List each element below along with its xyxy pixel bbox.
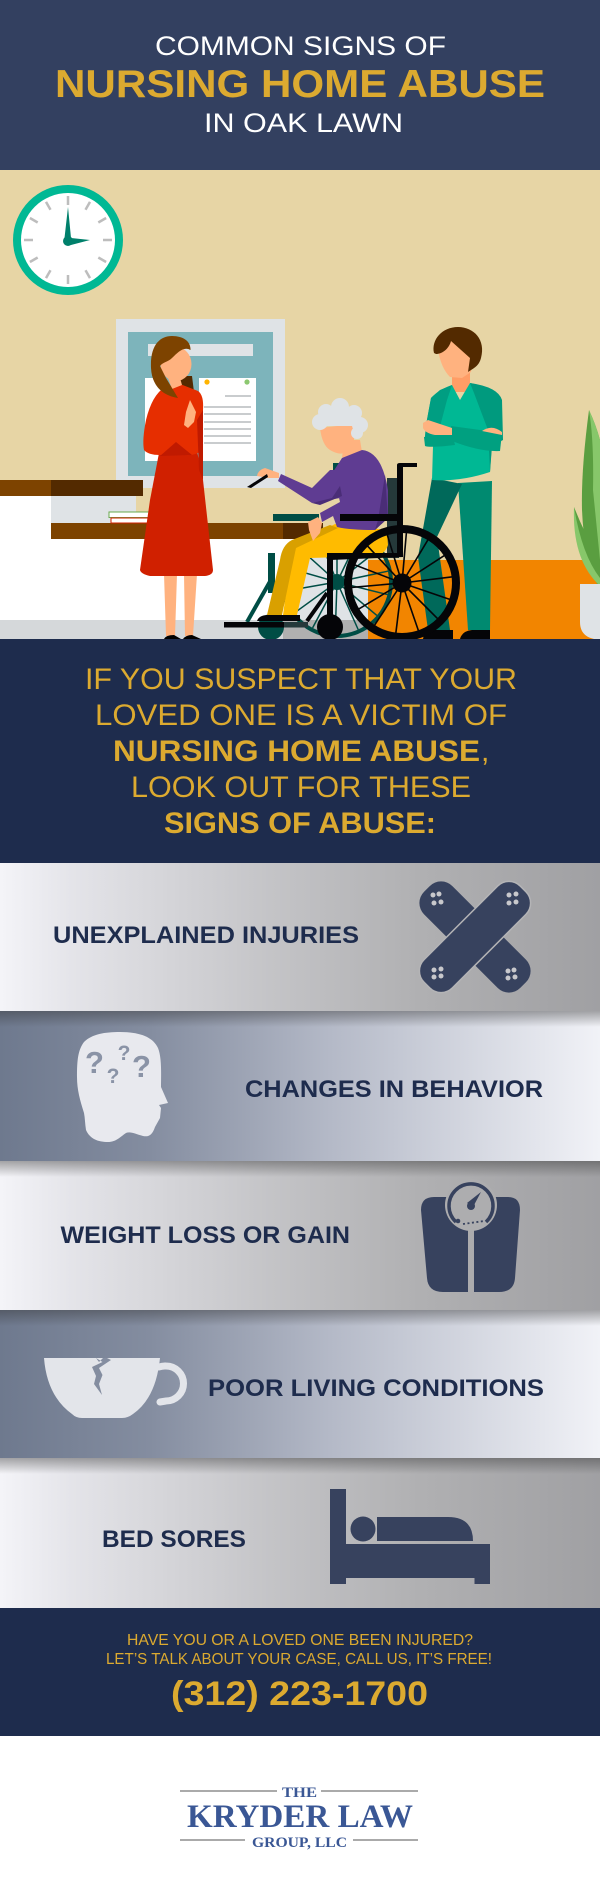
label: WEIGHT LOSS OR GAIN xyxy=(60,1222,350,1249)
title line 3: IN OAK LAWN xyxy=(204,108,403,138)
header panel xyxy=(0,0,600,170)
comma: , xyxy=(481,735,489,768)
label: POOR LIVING CONDITIONS xyxy=(208,1375,544,1402)
intro panel xyxy=(0,639,600,863)
logo: The Kryder Law Group: KRYDER LAW xyxy=(187,1799,413,1835)
icon: crossed bandages xyxy=(413,875,537,999)
icon: head with question marks: ? xyxy=(85,1045,104,1080)
cta line 1: HAVE YOU OR A LOVED ONE BEEN INJURED? xyxy=(127,1632,473,1649)
notice board xyxy=(116,319,285,488)
title line 2: NURSING HOME ABUSE xyxy=(55,63,545,106)
label: CHANGES IN BEHAVIOR xyxy=(245,1076,543,1103)
intro line 1: IF YOU SUSPECT THAT YOUR xyxy=(85,663,517,696)
icon: head with question marks: ? xyxy=(132,1049,151,1084)
books xyxy=(109,512,149,523)
potted plant xyxy=(574,410,600,639)
logo: The Kryder Law Group: THE xyxy=(282,1785,317,1801)
band: poor living conditions xyxy=(0,1310,600,1458)
icon: head with question marks xyxy=(77,1032,168,1142)
title line 1: COMMON SIGNS OF xyxy=(155,31,446,61)
wheelchair rear wheel and frame xyxy=(247,463,399,640)
floor and orange wall xyxy=(0,539,600,639)
intro line 5: SIGNS OF ABUSE: xyxy=(164,807,436,840)
icon: head with question marks: ? xyxy=(118,1042,130,1065)
label: UNEXPLAINED INJURIES xyxy=(53,922,359,949)
band: bed sores xyxy=(0,1458,600,1608)
band: unexplained injuries xyxy=(0,863,600,1011)
intro line 4: LOOK OUT FOR THESE xyxy=(131,771,471,804)
elderly woman in wheelchair xyxy=(247,398,388,621)
icon: wall clock xyxy=(13,185,123,295)
reception desk xyxy=(0,480,323,539)
intro line 2: LOVED ONE IS A VICTIM OF xyxy=(95,699,507,732)
icon: head with question marks: ? xyxy=(107,1065,119,1088)
illustration: nursing home scene xyxy=(0,170,600,640)
icon: bathroom scale xyxy=(421,1179,520,1292)
band: weight loss or gain xyxy=(0,1161,600,1310)
woman in red dress xyxy=(140,336,213,639)
footer call to action xyxy=(0,1608,600,1736)
logo: The Kryder Law Group xyxy=(0,1736,600,1895)
label: BED SORES xyxy=(102,1526,246,1553)
intro line 3: NURSING HOME ABUSE xyxy=(113,735,480,768)
band: changes in behavior xyxy=(0,1011,600,1161)
icon: cracked cup xyxy=(44,1358,184,1418)
cta line 2: LET’S TALK ABOUT YOUR CASE, CALL US, IT’S FREE! xyxy=(106,1651,492,1668)
nurse xyxy=(418,327,503,639)
phone number: (312) 223-1700 xyxy=(171,1675,428,1713)
wheelchair front wheel and frame xyxy=(224,463,456,640)
icon: person in bed xyxy=(330,1489,490,1584)
logo: The Kryder Law Group: GROUP, LLC xyxy=(252,1835,347,1851)
